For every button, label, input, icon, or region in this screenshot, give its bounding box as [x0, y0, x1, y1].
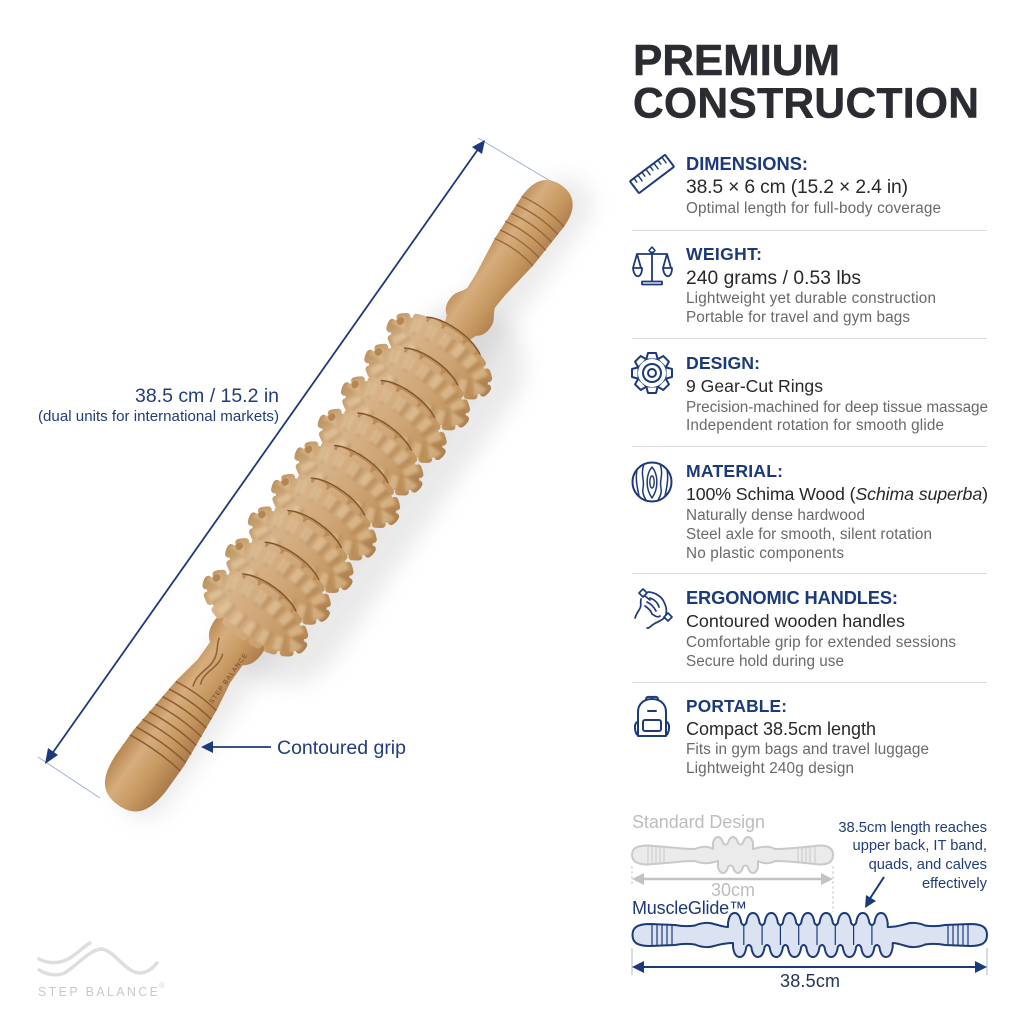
panel: weight: WEIGHT:: [686, 244, 762, 264]
panel: material: No plastic components: [686, 545, 844, 562]
panel: design: Independent rotation for smooth glide: [686, 417, 944, 434]
callout: reach note: quads, and calves: [869, 857, 987, 873]
callout: reach note: [838, 820, 988, 892]
icon: wood grain: [632, 462, 672, 502]
comparison diagram: [632, 812, 988, 991]
panel: dimensions: 38.5 × 6 cm (15.2 × 2.4 in): [686, 177, 908, 198]
MuscleGlide roller outline: [632, 913, 987, 957]
panel: portable: [635, 696, 929, 777]
title: CONSTRUCTION: [633, 80, 979, 128]
panel: design: [632, 353, 988, 434]
icon: gear: [632, 353, 672, 393]
title: [633, 36, 979, 128]
logo: Step Balance: ®: [159, 981, 165, 990]
standard roller outline: [632, 837, 833, 873]
callout arrow: [865, 877, 884, 908]
panel: material: Naturally dense hardwood: [686, 507, 865, 524]
panel: weight: 240 grams / 0.53 lbs: [686, 268, 861, 289]
length dimension arrow: [38, 138, 552, 798]
nine gear-cut rings: [193, 296, 505, 668]
length label: (dual units for international markets): [38, 408, 279, 425]
panel: ergonomic handles: Secure hold during use: [686, 653, 844, 670]
MuscleGlide length arrow: [632, 948, 987, 975]
callout: reach note: 38.5cm length reaches: [838, 820, 987, 836]
label: standard design: Standard Design: [632, 812, 765, 832]
label: 30cm: 30cm: [711, 880, 755, 900]
panel: dimensions: DIMENSIONS:: [686, 153, 808, 174]
icon: ruler: [630, 155, 674, 193]
panel: design: 9 Gear-Cut Rings: [686, 376, 823, 396]
panel: weight: [633, 244, 936, 326]
icon: balance scale: [633, 247, 672, 284]
standard length arrow: [632, 866, 833, 912]
title: PREMIUM: [633, 36, 840, 85]
handle: top grip: [432, 170, 583, 353]
callout: reach note: upper back, IT band,: [853, 838, 987, 854]
panel: portable: Fits in gym bags and travel luggage: [686, 741, 929, 758]
panel: weight: Lightweight yet durable construction: [686, 290, 936, 307]
panel: ergonomic handles: Comfortable grip for extended sessions: [686, 634, 956, 651]
engraved brand: STEP BALANCE: [208, 652, 250, 705]
callout: contoured grip: Contoured grip: [277, 737, 406, 759]
panel: dimensions: Optimal length for full-body coverage: [686, 200, 941, 217]
handle: bottom grip: [93, 598, 278, 823]
length label: 38.5 cm / 15.2 in: [135, 385, 279, 407]
label: 38.5cm: 38.5cm: [780, 971, 840, 991]
icon: backpack: [635, 697, 669, 736]
logo: Step Balance: STEP BALANCE: [38, 985, 158, 999]
product: wooden massage roller: [71, 152, 609, 839]
callout: contoured grip: [201, 737, 406, 759]
panel: material: Steel axle for smooth, silent rotation: [686, 526, 932, 543]
callout: reach note: effectively: [922, 876, 988, 892]
panel: ergonomic handles: [635, 587, 956, 670]
panel: portable: Compact 38.5cm length: [686, 719, 876, 739]
panel: weight: Portable for travel and gym bags: [686, 309, 910, 326]
panel: design: DESIGN:: [686, 353, 760, 373]
panel: material: MATERIAL:: [686, 461, 783, 481]
label: MuscleGlide: MuscleGlide™: [632, 898, 747, 918]
icon: hand gripping handle: [635, 589, 672, 628]
panel: portable: PORTABLE:: [686, 696, 787, 716]
panel: ergonomic handles: Contoured wooden handles: [686, 611, 905, 631]
panel: dimensions: [630, 153, 941, 217]
panel: material: 100% Schima Wood (Schima superba): [686, 484, 988, 504]
logo: Step Balance: [38, 943, 165, 999]
panel: portable: Lightweight 240g design: [686, 760, 854, 777]
panel: ergonomic handles: ERGONOMIC HANDLES:: [686, 587, 898, 608]
panel: material: [632, 461, 988, 562]
panel: design: Precision-machined for deep tissue massage: [686, 399, 988, 416]
length label: [38, 385, 279, 425]
